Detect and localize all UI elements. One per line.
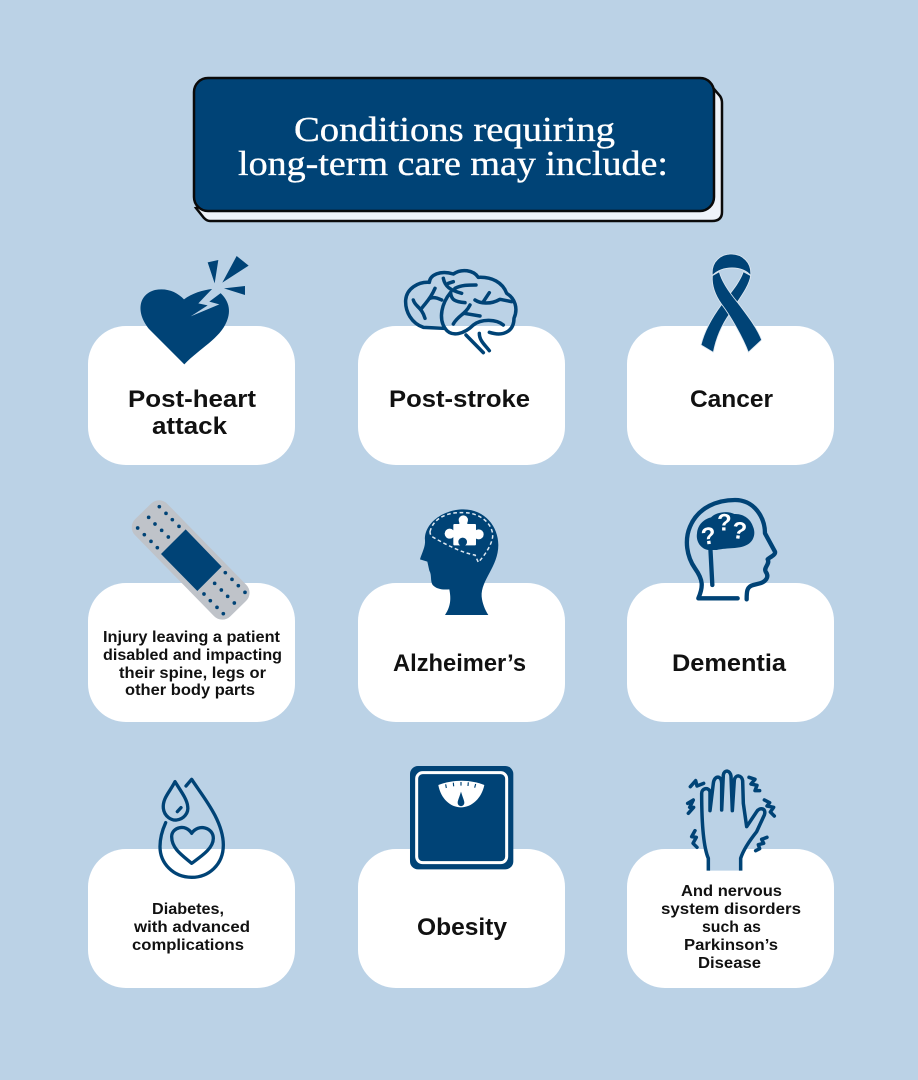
- label: Obesity: [417, 914, 508, 941]
- icon: ribbon: [701, 254, 762, 352]
- label: Post-stroke: [389, 386, 530, 413]
- label: such as: [702, 919, 761, 936]
- label: complications: [132, 937, 244, 954]
- title text: long-term care may include:: [238, 144, 668, 183]
- label: other body parts: [125, 682, 255, 699]
- label: disabled and impacting: [103, 647, 282, 664]
- icon: weighing scale: [410, 766, 513, 869]
- icon: head with question marks: ?: [717, 510, 732, 537]
- icon: trembling hand: [688, 771, 774, 871]
- label: Cancer: [690, 386, 773, 413]
- panel: nervous system disorders: [627, 771, 834, 988]
- label: Dementia: [672, 650, 787, 677]
- panel: post-stroke: [358, 271, 565, 465]
- label: [132, 901, 250, 954]
- label: Post-heart: [128, 386, 256, 413]
- label: [103, 629, 282, 699]
- label: [661, 883, 801, 972]
- panel: alzheimers: [358, 509, 565, 722]
- title text: [238, 110, 668, 183]
- icon: head with puzzle piece: [420, 509, 498, 615]
- icon: bandage: [127, 496, 254, 624]
- label: system disorders: [661, 901, 801, 918]
- label: their spine, legs or: [119, 665, 266, 682]
- icon: broken heart: [141, 256, 249, 364]
- label: And nervous: [681, 883, 782, 900]
- label: [128, 386, 256, 440]
- label: with advanced: [133, 919, 250, 936]
- icon: brain: [406, 271, 516, 353]
- panel: cancer: [627, 254, 834, 465]
- icon: drops and heart: [160, 779, 223, 877]
- icon: head with question marks: ?: [699, 522, 718, 551]
- label: Alzheimer’s: [393, 650, 526, 677]
- icon: head with question marks: ?: [730, 517, 749, 546]
- panel: obesity: [358, 766, 565, 988]
- panel: diabetes: [88, 779, 295, 988]
- icon: head with question marks: [687, 500, 775, 599]
- panel: injury: [88, 496, 295, 722]
- label: Parkinson’s: [684, 937, 778, 954]
- label: Disease: [698, 955, 761, 972]
- label: Injury leaving a patient: [103, 629, 280, 646]
- label: attack: [152, 413, 228, 440]
- panel: dementia: [627, 500, 834, 722]
- title banner: [194, 78, 722, 221]
- label: Diabetes,: [152, 901, 224, 918]
- panel: post-heart attack: [88, 256, 295, 465]
- title text: Conditions requiring: [294, 110, 615, 149]
